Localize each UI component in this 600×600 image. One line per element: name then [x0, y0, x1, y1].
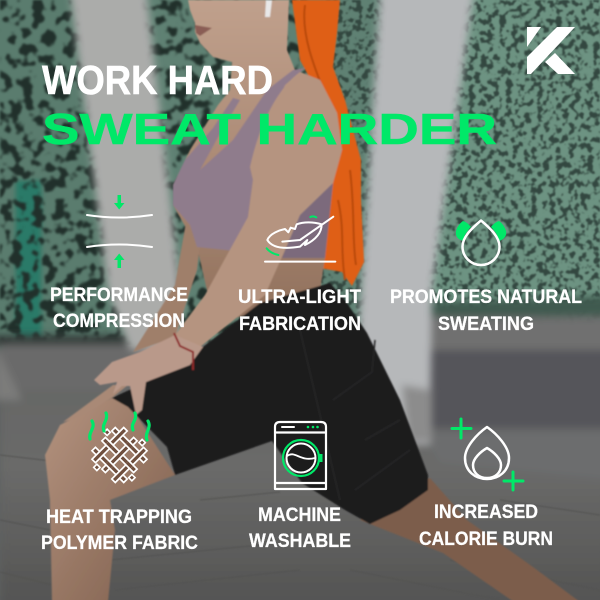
- icon: washing machine: [275, 422, 326, 489]
- shorts: [112, 283, 428, 524]
- neck, chest and torso: [173, 0, 342, 325]
- label: ultra-light fabrication: [238, 287, 361, 335]
- title: SWEAT HARDER: SWEAT HARDER: [42, 105, 497, 154]
- label: heat trapping polymer fabric: POLYMER FABRIC: [41, 533, 198, 554]
- icon: heat trapping weave: [81, 413, 158, 493]
- label: machine washable: WASHABLE: [249, 531, 351, 552]
- label: increased calorie burn: [419, 502, 553, 550]
- label: heat trapping polymer fabric: HEAT TRAPPING: [46, 507, 192, 528]
- rear leg: [360, 478, 580, 600]
- label: increased calorie burn: CALORIE BURN: [419, 529, 553, 550]
- bra: [173, 68, 305, 251]
- earbud: [265, 0, 272, 17]
- label: performance compression: [50, 285, 188, 332]
- icon: calorie flame: [452, 419, 523, 490]
- label: promotes natural sweating: PROMOTES NATURAL: [390, 287, 582, 308]
- hair: [292, 0, 364, 286]
- lips: [195, 25, 212, 36]
- front arm: [175, 72, 342, 347]
- back hand: [63, 385, 128, 422]
- label: heat trapping polymer fabric: [41, 507, 198, 554]
- label: machine washable: MACHINE: [258, 505, 341, 526]
- label: ultra-light fabrication: ULTRA-LIGHT: [238, 287, 361, 308]
- label: promotes natural sweating: SWEATING: [438, 314, 534, 335]
- label: increased calorie burn: INCREASED: [434, 502, 538, 523]
- label: ultra-light fabrication: FABRICATION: [239, 314, 361, 335]
- label: promotes natural sweating: [390, 287, 582, 335]
- logo: K mark: [527, 27, 575, 74]
- icon: performance compression: [87, 195, 152, 268]
- bra back: [282, 183, 333, 258]
- back arm: [133, 222, 200, 352]
- wrist band: [174, 333, 193, 370]
- front leg: [45, 398, 175, 600]
- label: performance compression: PERFORMANCE: [50, 285, 188, 306]
- label: machine washable: [249, 505, 351, 552]
- front hand: [94, 335, 203, 415]
- label: performance compression: COMPRESSION: [53, 311, 185, 332]
- title: WORK HARD: WORK HARD: [42, 57, 273, 103]
- icon: sweat drop: [456, 220, 506, 265]
- icon: feather: [265, 216, 335, 262]
